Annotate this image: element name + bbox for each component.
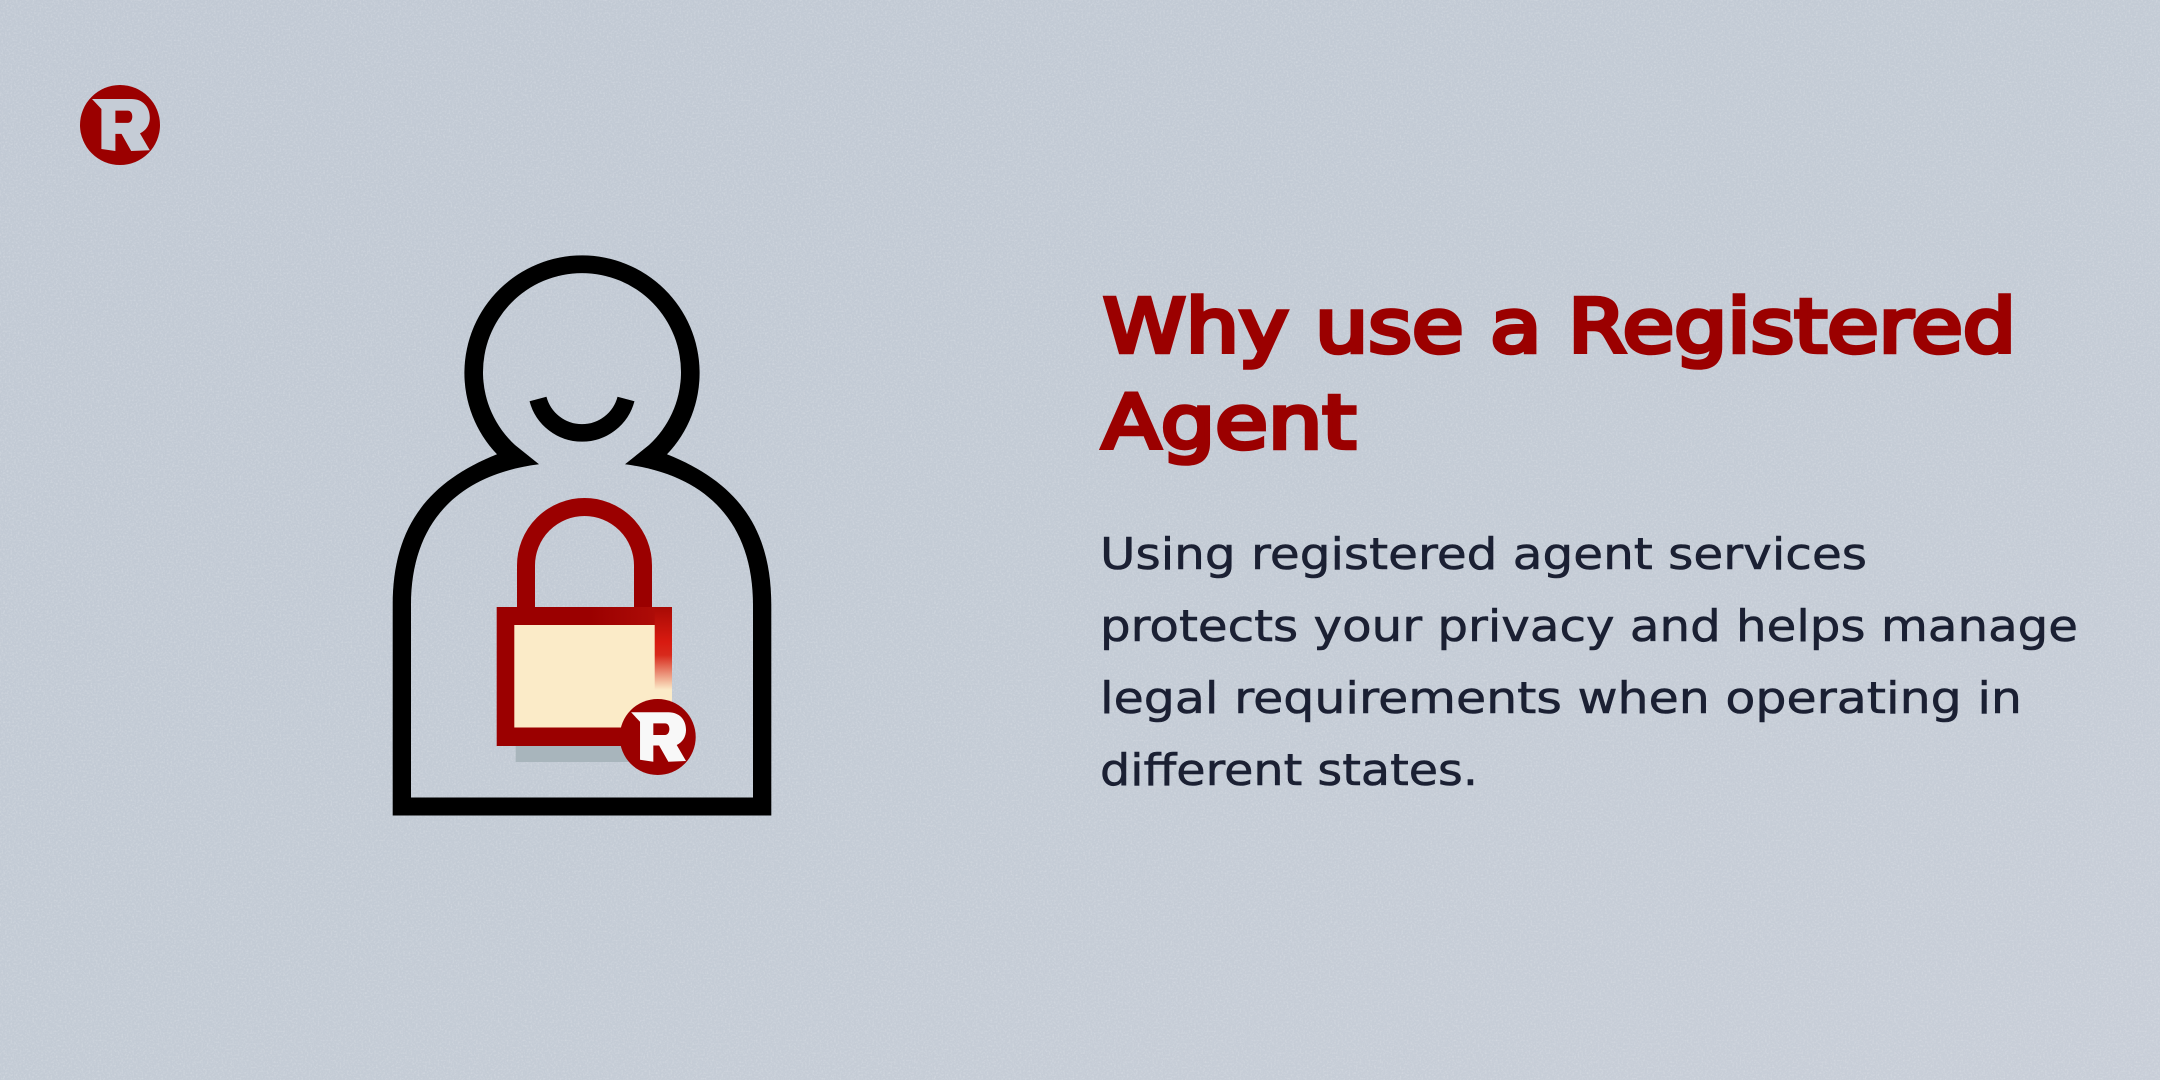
padlock shackle [526, 507, 643, 607]
body text: different states. [1100, 745, 1478, 796]
icon: padlock [497, 507, 672, 762]
body text: Using registered agent services [1100, 529, 1867, 580]
padlock shadow [516, 746, 666, 762]
icon: smile [538, 399, 626, 433]
body text: legal requirements when operating in [1100, 673, 2022, 724]
padlock right fade [655, 607, 672, 690]
padlock body fill [514, 625, 672, 728]
padlock top highlight [590, 607, 672, 625]
illustration: person with padlock [393, 255, 771, 816]
badge: R on padlock [620, 699, 696, 775]
body text: protects your privacy and helps manage [1100, 601, 2078, 652]
heading: Agent [1102, 380, 1356, 466]
heading [1102, 284, 2016, 466]
icon: person outline [393, 255, 771, 816]
body text [1100, 529, 2078, 796]
padlock frame [497, 607, 640, 746]
logo: R badge [80, 85, 160, 165]
heading: Why use a Registered [1103, 284, 2016, 370]
